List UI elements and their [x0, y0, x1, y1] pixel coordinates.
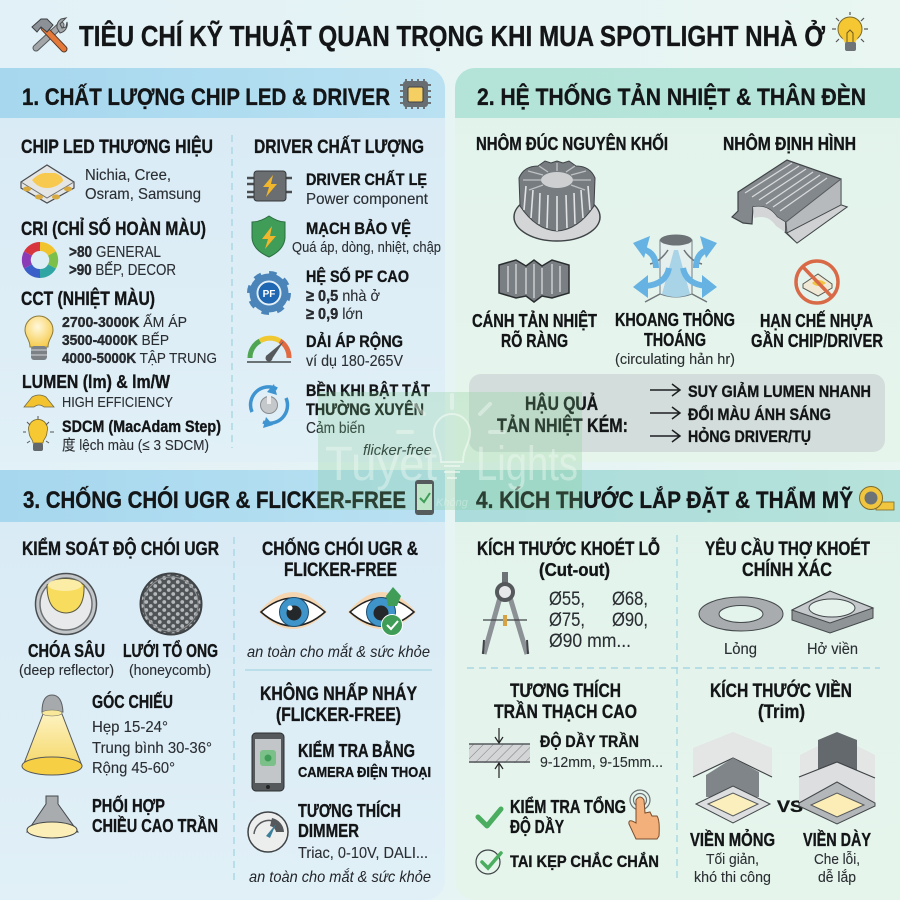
block: power factor: ≥ 0,9 lớn [306, 306, 363, 323]
icon: light bulb [832, 12, 868, 51]
label: visible fins [472, 310, 597, 351]
heading: glare and flicker: FLICKER-FREE [284, 560, 397, 581]
icon: phone camera [252, 733, 284, 791]
heading: precise cutting: CHÍNH XÁC [742, 559, 832, 581]
icon: refresh switch [251, 384, 288, 428]
block: thick trim [803, 829, 871, 886]
label: firm clips: TAI KẸP CHẮC CHẮN [510, 852, 659, 871]
labels: loose and gap [724, 641, 858, 658]
heading: section 4: 4. KÍCH THƯỚC LẮP ĐẶT & THẨM MỸ [476, 486, 853, 514]
icon: extruded heat sink [732, 160, 847, 243]
icon: pointing hand [629, 790, 659, 839]
block: CCT: 3500-4000K BẾP [62, 332, 169, 349]
heading: driver quality: DRIVER CHẤT LƯỢNG [254, 136, 424, 158]
block: protection: MẠCH BẢO VỆ [306, 219, 411, 238]
block: ceiling thickness: ĐỘ DẦY TRẦN [540, 732, 639, 751]
block: dimmer compatibility: Triac, 0-10V, DALI... [298, 845, 428, 862]
block: thin trim: khó thi công [694, 869, 771, 886]
icon: SDCM bulb [23, 416, 54, 451]
caption: eye safety bottom: an toàn cho mắt & sức khỏe [249, 867, 431, 886]
block: SDCM: 度 lệch màu (≤ 3 SDCM) [62, 437, 209, 454]
panel: glare and flicker [0, 470, 445, 900]
block: protection [292, 219, 441, 256]
block: CCT: 4000-5000K TẬP TRUNG [62, 350, 217, 367]
icon: color ring [26, 246, 54, 274]
block: CRI: >90 BẾP, DECOR [69, 260, 176, 279]
icon: thick trim [799, 732, 875, 824]
icon: driver module [247, 171, 292, 201]
icon: beam cone [22, 695, 82, 775]
heading: glare and flicker: CHỐNG CHÓI UGR & [262, 538, 418, 560]
callout: poor cooling consequences: HỎNG DRIVER/TỤ [688, 427, 811, 446]
block: CCT [21, 288, 217, 367]
icon: compass [483, 572, 528, 654]
block: phone camera test: CAMERA ĐIỆN THOẠI [298, 763, 431, 781]
label: deep reflector: CHÓA SÂU [28, 640, 105, 661]
callout: poor cooling consequences: TẢN NHIỆT KÉM: [497, 415, 628, 437]
icon: deep reflector [36, 574, 96, 634]
heading: drywall compatibility: TƯƠNG THÍCH [510, 680, 621, 702]
label: honeycomb [123, 640, 218, 679]
heading: precise cutting [705, 538, 870, 581]
label: vs: VS [777, 797, 803, 816]
label: ventilation chamber: KHOANG THÔNG [615, 309, 735, 330]
block: cut-out sizes: Ø90, [612, 610, 648, 631]
icon: round heat sink [514, 161, 600, 241]
icon: gauge [247, 338, 291, 362]
block: chip LED brands: CHIP LED THƯƠNG HIỆU [21, 136, 213, 158]
heading: drywall compatibility: TRẦN THẠCH CAO [494, 701, 637, 723]
block: cut-out sizes [477, 538, 660, 652]
block: beam angle: Trung bình 30-36° [92, 740, 212, 757]
block: chip LED brands: Osram, Samsung [85, 186, 201, 203]
block: cut-out sizes: Ø55, [549, 589, 585, 610]
block: phone camera test: KIỂM TRA BẰNG [298, 740, 415, 761]
block: switching: THƯỜNG XUYÊN [306, 400, 424, 419]
block: thin trim: VIỀN MỎNG [690, 829, 775, 850]
block: cut-out sizes: (Cut-out) [539, 560, 610, 580]
block: dimmer compatibility [298, 800, 428, 862]
icon: healthy eye [259, 592, 327, 629]
callout: poor cooling consequences: ĐỔI MÀU ÁNH SÁNG [688, 405, 831, 424]
block: phone camera test [298, 740, 431, 781]
label: honeycomb: (honeycomb) [129, 662, 211, 679]
label: limit plastic: HẠN CHẾ NHỰA [760, 310, 873, 331]
icon: ceiling thickness [469, 728, 530, 778]
block: switching: BỀN KHI BẬT TẮT [306, 381, 431, 400]
block: total thickness [510, 796, 626, 837]
block: beam angle: Rộng 45-60° [92, 760, 175, 777]
icon: airflow chamber [633, 234, 717, 302]
label: ventilation chamber: THOÁNG [644, 329, 706, 350]
heading: no flicker: KHÔNG NHẤP NHÁY [260, 683, 417, 705]
icon: gapped square [792, 591, 873, 633]
block: driver: DRIVER CHẤT LẸ [306, 170, 427, 189]
icon: thin trim [693, 732, 772, 823]
block: lumen: LUMEN (lm) & lm/W [22, 372, 170, 392]
icon: green check [478, 809, 501, 826]
block: thin trim: Tối giản, [706, 851, 759, 868]
label: extruded aluminum: NHÔM ĐỊNH HÌNH [723, 133, 856, 154]
icon: phone check [415, 480, 434, 515]
icon: lamp shade [27, 796, 78, 838]
heading: section 1: 1. CHẤT LƯỢNG CHIP LED & DRIVER [22, 83, 390, 111]
block: protection: Quá áp, dòng, nhiệt, chập [292, 239, 441, 256]
block: beam angle [92, 691, 212, 777]
block: ceiling height: CHIỀU CAO TRẦN [92, 815, 218, 836]
block: dimmer compatibility: TƯƠNG THÍCH [298, 800, 401, 821]
watermark: Tuyet [325, 438, 437, 491]
block: power factor [306, 266, 409, 323]
block: CCT: CCT (NHIỆT MÀU) [21, 288, 155, 310]
block: power factor: HỆ SỐ PF CAO [306, 266, 409, 286]
labels: loose and gap: Lỏng [724, 641, 757, 658]
icon: heat sink fins [499, 260, 569, 302]
block: ceiling thickness: 9-12mm, 9-15mm... [540, 754, 663, 771]
block: thick trim: Che lỗi, [814, 851, 860, 868]
heading: trim size: KÍCH THƯỚC VIỀN [710, 680, 852, 702]
block: switching [306, 381, 432, 459]
icon: circled check [476, 850, 501, 874]
heading: no flicker: (FLICKER-FREE) [276, 705, 401, 726]
watermark: Không [436, 497, 469, 509]
callout: poor cooling consequences: HẬU QUẢ [525, 393, 598, 415]
panel: chip LED and driver [0, 68, 445, 462]
block: thick trim: dễ lắp [818, 869, 856, 886]
icon: lumen arc [24, 395, 54, 407]
block: beam angle: Hẹp 15-24° [92, 719, 168, 736]
label: visible fins: RÕ RÀNG [501, 330, 568, 351]
block: ceiling thickness [540, 732, 663, 771]
block: lumen: HIGH EFFICIENCY [62, 394, 173, 411]
block: cut-out sizes: Ø90 mm... [549, 631, 631, 652]
block: lumen [22, 372, 173, 411]
block: ceiling height [92, 795, 218, 836]
block: thick trim: VIỀN DÀY [803, 829, 871, 850]
block: SDCM: SDCM (MacAdam Step) [62, 417, 221, 436]
block: cut-out sizes: Ø68, [612, 589, 648, 610]
block: cut-out sizes: KÍCH THƯỚC KHOÉT LỖ [477, 538, 660, 560]
icon: protected eye [348, 587, 416, 636]
block: CRI: >80 GENERAL [69, 244, 161, 261]
block: driver [306, 170, 429, 208]
icon: honeycomb [140, 574, 202, 634]
heading: trim size: (Trim) [758, 702, 805, 723]
heading: glare and flicker [262, 538, 418, 581]
panel: installation size [455, 470, 900, 900]
label: ventilation chamber: (circulating hản hr) [615, 351, 735, 368]
icon: warm bulb [25, 316, 53, 360]
icon: shield [252, 216, 285, 257]
label: limit plastic [751, 310, 883, 351]
label: ventilation chamber [615, 309, 735, 368]
block: cut-out sizes: Ø75, [549, 610, 585, 631]
watermark: Lights [476, 438, 578, 491]
block: total thickness: KIỂM TRA TỔNG [510, 796, 626, 817]
labels: loose and gap: Hở viền [807, 641, 858, 658]
block: wide voltage [306, 332, 403, 370]
panel: heat dissipation [455, 68, 900, 462]
icon: no plastic [796, 261, 838, 303]
label: honeycomb: LƯỚI TỔ ONG [123, 640, 218, 661]
block: driver: Power component [306, 191, 429, 208]
block: CRI [21, 218, 206, 279]
label: deep reflector [19, 640, 114, 679]
label: deep reflector: (deep reflector) [19, 662, 114, 679]
block: CRI: CRI (CHỈ SỐ HOÀN MÀU) [21, 218, 206, 240]
block: total thickness: ĐỘ DẦY [510, 816, 564, 837]
label: die-cast aluminum: NHÔM ĐÚC NGUYÊN KHỐI [476, 133, 668, 154]
block: thin trim [690, 829, 775, 886]
icon: dimmer [248, 812, 288, 852]
heading: section 3: 3. CHỐNG CHÓI UGR & FLICKER-FREE [23, 486, 406, 514]
block: CCT: 2700-3000K ẤM ÁP [62, 314, 187, 331]
heading: no flicker [260, 683, 417, 726]
heading: drywall compatibility [494, 680, 637, 723]
block: switching: Cảm biến [306, 420, 365, 437]
caption: eye safety: an toàn cho mắt & sức khỏe [247, 642, 430, 661]
heading: UGR control: KIỂM SOÁT ĐỘ CHÓI UGR [22, 538, 219, 560]
block: wide voltage: ví dụ 180-265V [306, 353, 403, 370]
block: wide voltage: DẢI ÁP RỘNG [306, 332, 403, 351]
icon: tape measure [860, 486, 894, 510]
block: beam angle: GÓC CHIẾU [92, 691, 173, 712]
watermark [318, 392, 582, 510]
callout: poor cooling consequences: SUY GIẢM LUMEN NHANH [688, 382, 871, 401]
icon: loose ring [699, 597, 783, 631]
callout: poor cooling consequences [469, 374, 885, 452]
block: switching: flicker-free [363, 442, 432, 459]
heading: trim size [710, 680, 852, 723]
label: visible fins: CÁNH TẢN NHIỆT [472, 310, 597, 331]
icon: PF gear [249, 273, 289, 313]
block: chip LED brands [21, 136, 213, 203]
icon: CPU chip [400, 79, 431, 109]
icon: LED chip [21, 165, 74, 203]
block: power factor: ≥ 0,5 nhà ở [306, 288, 380, 305]
block: chip LED brands: Nichia, Cree, [85, 167, 171, 184]
icon: hammer and wrench [32, 18, 67, 49]
block: ceiling height: PHỐI HỢP [92, 795, 165, 816]
icon: PF gear: PF [263, 289, 275, 300]
block: SDCM [62, 417, 221, 454]
block: dimmer compatibility: DIMMER [298, 821, 359, 841]
